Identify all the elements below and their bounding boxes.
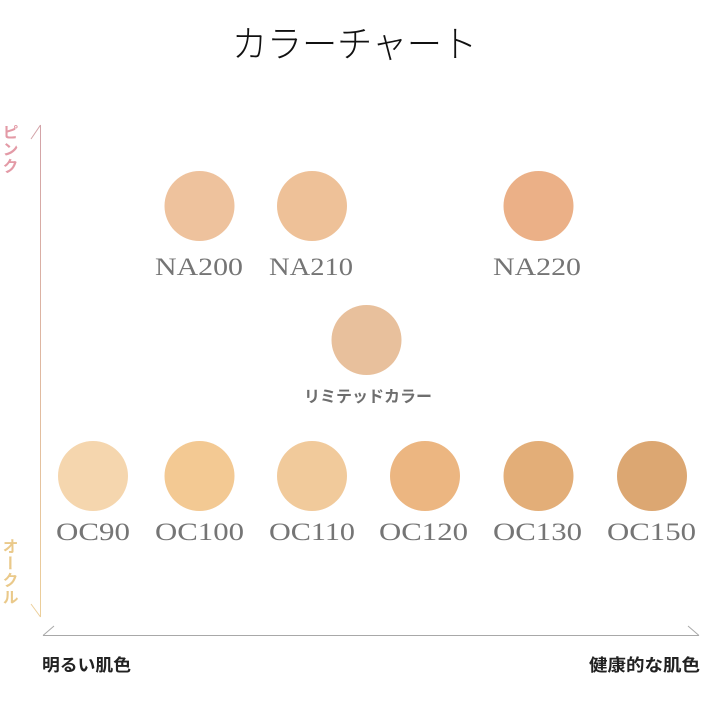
swatch: OC130: [493, 441, 582, 546]
swatch: OC90: [56, 441, 130, 546]
swatch: NA210: NA210: [269, 254, 353, 281]
swatch: NA220: NA220: [493, 254, 581, 281]
swatch: NA200: [155, 171, 243, 281]
vertical axis: pink to ochre: [31, 125, 40, 617]
title: カラーチャート: [232, 24, 477, 65]
swatch: limited colour: [304, 305, 432, 406]
swatch: OC110: [269, 441, 355, 546]
swatch: OC110: OC110: [269, 519, 355, 546]
swatch: OC90: OC90: [56, 519, 130, 546]
swatch: limited colour: リミテッドカラー: [304, 388, 432, 406]
horizontal axis: brightness: [43, 626, 699, 636]
axis label: pink: ピンク: [0, 124, 18, 175]
swatch: NA210: [269, 171, 353, 281]
swatch: NA220: [493, 171, 581, 281]
swatch: OC100: [155, 441, 244, 546]
swatch: OC150: [607, 441, 696, 546]
axis label: healthy skin: 健康的な肌色: [589, 655, 700, 675]
swatch: NA200: NA200: [155, 254, 243, 281]
swatch: OC150: OC150: [607, 519, 696, 546]
axis label: ochre: オークル: [0, 538, 18, 606]
swatch: OC120: OC120: [379, 519, 468, 546]
axis label: light skin: 明るい肌色: [42, 655, 131, 675]
swatch: OC130: OC130: [493, 519, 582, 546]
swatch: OC120: [379, 441, 468, 546]
swatch: OC100: OC100: [155, 519, 244, 546]
